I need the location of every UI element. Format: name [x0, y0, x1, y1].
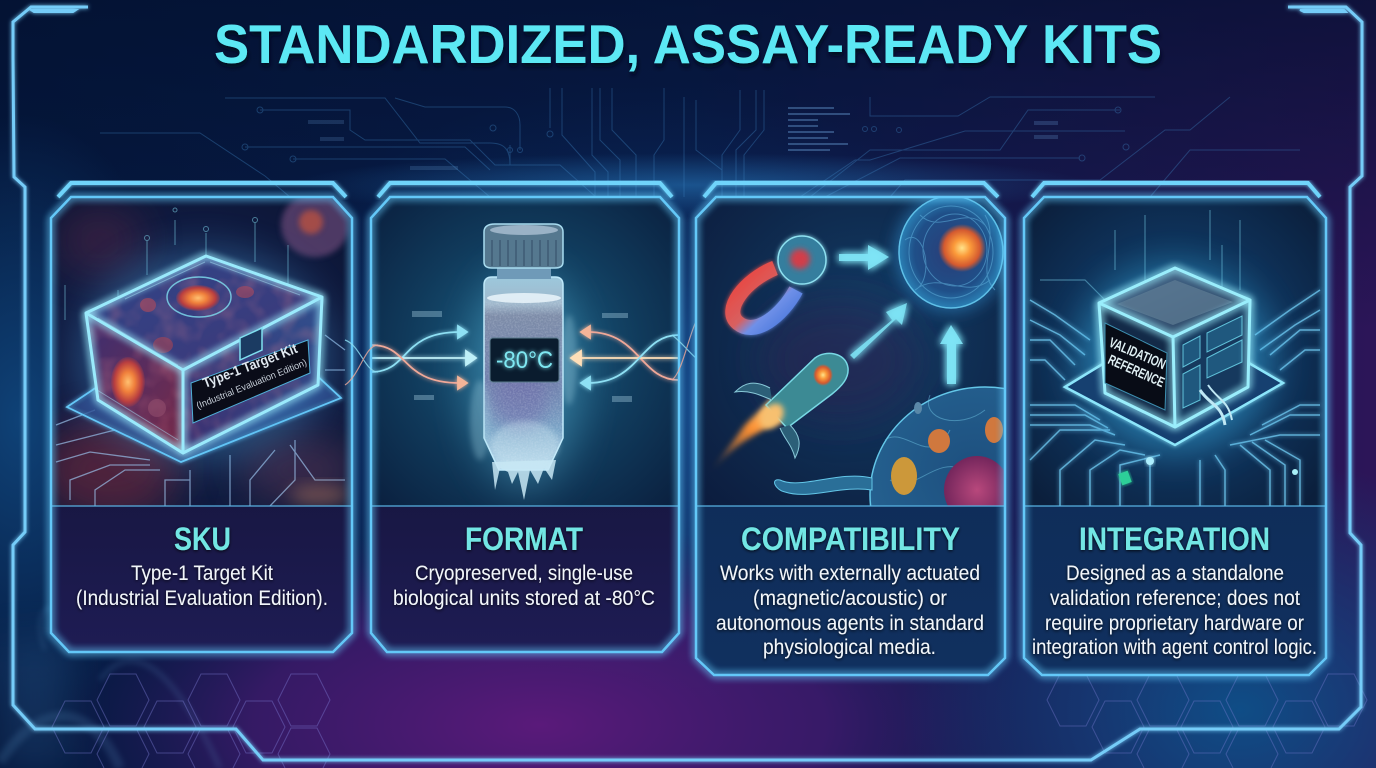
- card top strip: INTEGRATION: [1032, 183, 1320, 197]
- divider: INTEGRATION: [1024, 505, 1326, 507]
- divider: COMPATIBILITY: [696, 505, 1005, 507]
- dna strand decoration: [0, 608, 220, 768]
- card outline: COMPATIBILITY: [696, 197, 1005, 675]
- rocket agent: [716, 352, 849, 464]
- arrows toward target: [839, 245, 963, 384]
- bottom cell cluster: [774, 386, 1004, 506]
- base plate: [1060, 360, 1287, 449]
- magnet agent: [733, 236, 826, 327]
- card body: FORMAT: [371, 197, 679, 652]
- kit label: Type-1 Target Kit: [200, 340, 300, 391]
- heading: COMPATIBILITY: COMPATIBILITY: [741, 521, 960, 557]
- box faces: [86, 256, 322, 370]
- description: COMPATIBILITY: physiological media.: [763, 636, 936, 659]
- description: SKU: Type-1 Target Kit: [131, 562, 273, 585]
- card outline: FORMAT: [371, 197, 679, 652]
- card top strip: SKU: [58, 183, 346, 197]
- panel: SKU: [40, 183, 360, 652]
- heading: INTEGRATION: INTEGRATION: [1079, 521, 1270, 557]
- title: STANDARDIZED, ASSAY-READY KITS: [214, 13, 1162, 75]
- panel: FORMAT: [371, 183, 679, 652]
- cube label: VALIDATION: [1107, 334, 1168, 372]
- description: COMPATIBILITY: [716, 562, 984, 659]
- illustration: validation cube: [1024, 197, 1326, 507]
- kit label: (Industrial Evaluation Edition): [195, 357, 309, 412]
- target cell: [895, 192, 1007, 312]
- card body: SKU: [51, 197, 352, 652]
- cold flow arrows: [371, 326, 679, 389]
- description: SKU: (Industrial Evaluation Edition).: [76, 587, 328, 610]
- description: SKU: [76, 562, 328, 610]
- heading: SKU: SKU: [174, 521, 231, 557]
- temperature display: [490, 338, 559, 382]
- illustration: cells and agents: [698, 198, 1004, 506]
- vial body: [484, 277, 563, 470]
- vial cap: [484, 224, 563, 268]
- card top strip: FORMAT: [378, 183, 672, 197]
- description: FORMAT: biological units stored at -80°C: [393, 587, 655, 610]
- circuit traces: [1030, 290, 1320, 506]
- illustration: frozen vial: [371, 197, 679, 507]
- description: COMPATIBILITY: Works with externally actuated: [720, 562, 980, 585]
- description: INTEGRATION: require proprietary hardware or: [1045, 612, 1304, 635]
- glow: [1080, 270, 1270, 450]
- circuit traces behind cards: [100, 88, 1300, 197]
- description: FORMAT: [393, 562, 655, 610]
- illustration: kit box: [52, 198, 350, 506]
- hexagon pattern right: [1047, 674, 1367, 768]
- description: COMPATIBILITY: (magnetic/acoustic) or: [753, 587, 947, 610]
- temperature display: -80°C: [496, 347, 553, 374]
- icicles: [492, 460, 556, 500]
- description: FORMAT: Cryopreserved, single-use: [415, 562, 633, 585]
- description: INTEGRATION: Designed as a standalone: [1066, 562, 1284, 585]
- base plate: [67, 360, 341, 462]
- panel: INTEGRATION: [1024, 183, 1326, 675]
- divider: FORMAT: [371, 505, 679, 507]
- cube label: [1105, 323, 1168, 410]
- card body: INTEGRATION: [1024, 197, 1326, 675]
- data readout decoration: [308, 107, 1058, 170]
- description: INTEGRATION: integration with agent control logic.: [1032, 636, 1317, 659]
- description: INTEGRATION: validation reference; does not: [1050, 587, 1300, 610]
- description: INTEGRATION: [1032, 562, 1317, 659]
- card top strip: COMPATIBILITY: [704, 183, 998, 197]
- divider: SKU: [52, 505, 352, 507]
- hexagon pattern left: [52, 674, 330, 768]
- card outline: SKU: [51, 197, 352, 652]
- connector flow lines between cards: [345, 308, 705, 385]
- card outline: INTEGRATION: [1024, 197, 1326, 675]
- cube: [1104, 270, 1242, 335]
- kit label: [191, 340, 310, 423]
- panel: COMPATIBILITY: [688, 180, 1014, 684]
- description: COMPATIBILITY: autonomous agents in standard: [716, 612, 984, 635]
- card body: COMPATIBILITY: [696, 197, 1005, 675]
- heading: FORMAT: FORMAT: [465, 521, 583, 557]
- cube label: REFERENCE: [1106, 351, 1167, 390]
